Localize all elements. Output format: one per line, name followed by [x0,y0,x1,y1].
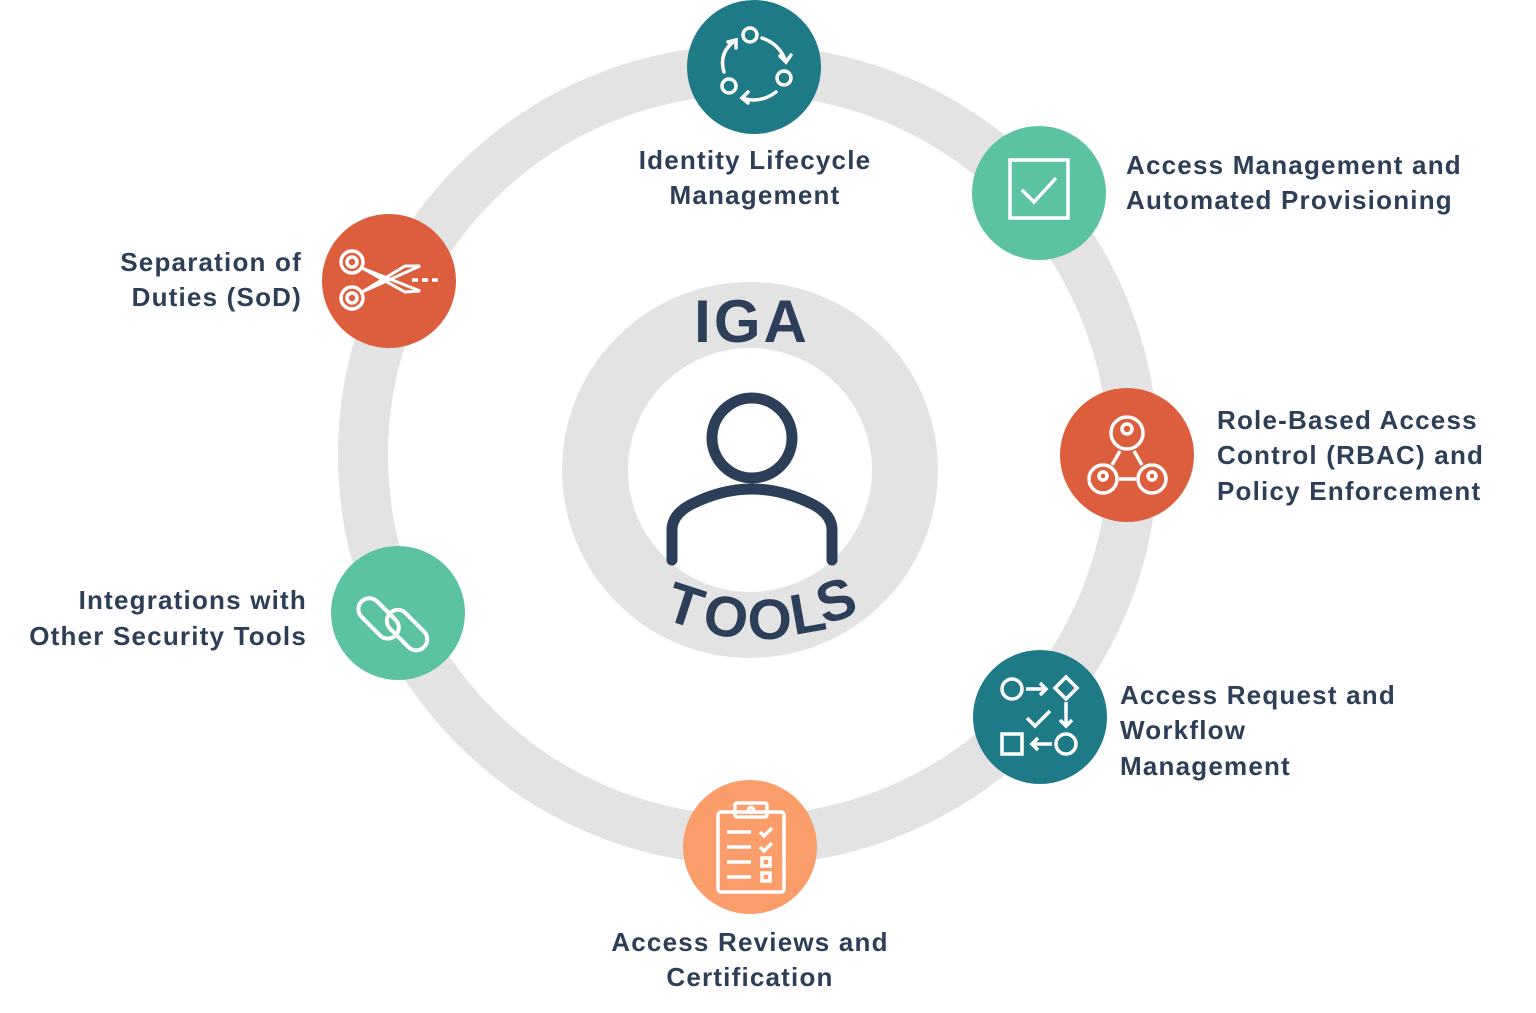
label: Automated Provisioning [1126,185,1453,215]
label: Access Management and [1126,150,1462,180]
label: Certification [666,962,834,992]
heading: TOOLS: T [658,570,711,642]
center badge: IGA Tools [595,288,905,652]
label: Access Request and [1120,680,1396,710]
label: Policy Enforcement [1217,476,1481,506]
node: Integrations [29,546,465,680]
icon: clipboard [718,803,784,892]
label: Other Security Tools [29,621,307,651]
label: Identity Lifecycle [639,145,871,175]
icon: cycle [722,28,791,103]
icon: workflow [1002,677,1077,754]
label: Role-Based Access [1217,405,1478,435]
label: Management [1120,751,1291,781]
label: Control (RBAC) and [1217,440,1484,470]
icon: roles triangle [1089,417,1166,493]
heading: TOOLS [658,565,864,652]
heading: TOOLS: L [785,579,830,648]
heading: TOOLS: O [747,588,792,652]
icon: person [672,398,832,560]
icon: scissors [341,251,440,309]
node: Separation of Duties [120,214,456,348]
node: Identity Lifecycle Management [639,0,871,210]
label: Separation of [120,247,302,277]
label: Integrations with [79,585,307,615]
node: RBAC [1060,388,1484,522]
node: Access Reviews and Certification [611,780,889,992]
heading: TOOLS: O [699,582,753,652]
label: Management [670,180,840,210]
label: Duties (SoD) [132,282,302,312]
label: Workflow [1120,715,1246,745]
label: Access Reviews and [611,927,889,957]
node: Access Request and Workflow Management [973,650,1396,784]
outer ring [363,70,1133,840]
heading: TOOLS: S [808,565,864,637]
icon: chain link [354,594,432,655]
heading: IGA: IGA [694,288,810,355]
node: Access Management and Automated Provisioning [972,126,1462,260]
icon: checkbox [1010,160,1068,218]
